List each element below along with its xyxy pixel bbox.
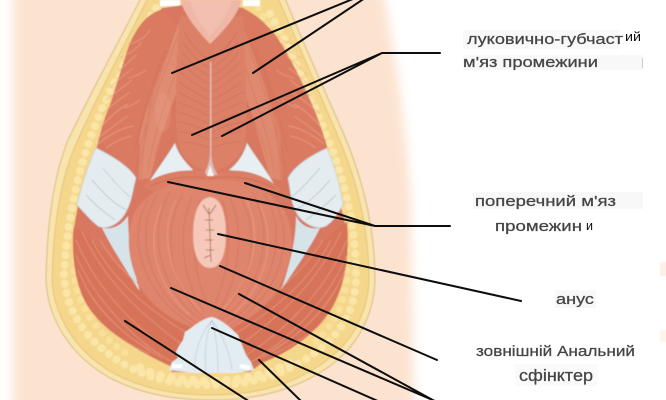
triangular white membranes (148, 143, 275, 186)
ischiocavernosus muscles (98, 10, 326, 180)
label: transverse perineal: поперечний м'яз (475, 193, 616, 210)
anus (193, 197, 226, 268)
label: transverse perineal: промежин (495, 218, 582, 235)
lower pointer lines (125, 288, 442, 400)
pointer lines (125, 0, 521, 400)
ligament blue sheets (77, 148, 343, 292)
bulbospongiosus pointer (192, 53, 440, 136)
external anal sphincter pointer (220, 266, 437, 360)
levator ani lower muscles (74, 222, 348, 368)
top pale structure (181, 0, 241, 44)
label: external anal sphincter (476, 343, 635, 386)
label: bulbospongiosus: луковично-губчаст (467, 31, 623, 48)
label: external anal sphincter: зовнішній Анальний (476, 343, 635, 360)
label: bulbospongiosus: м'яз промежини (463, 54, 598, 71)
external anal sphincter (129, 180, 292, 334)
anus pointer (218, 234, 521, 301)
label: external anal sphincter: сфінктер (519, 367, 593, 385)
label: anus (555, 290, 596, 308)
subcutaneous fat layer (46, 0, 375, 400)
label: transverse perineal (473, 192, 643, 235)
label: transverse perineal: и (586, 219, 593, 233)
fibrous coccygeal tissue (169, 317, 254, 373)
top pointer lines (172, 0, 370, 73)
muscle base (73, 4, 347, 372)
transverse perineal muscle (142, 171, 282, 202)
bulbospongiosus muscle (176, 16, 246, 176)
label: bulbospongiosus (463, 30, 643, 71)
label: anus: анус (556, 292, 594, 308)
white gaps beside the top structure (160, 0, 260, 6)
illustration (46, 0, 375, 400)
transverse perineal pointer (168, 182, 450, 226)
label: bulbospongiosus: ий (625, 30, 641, 44)
